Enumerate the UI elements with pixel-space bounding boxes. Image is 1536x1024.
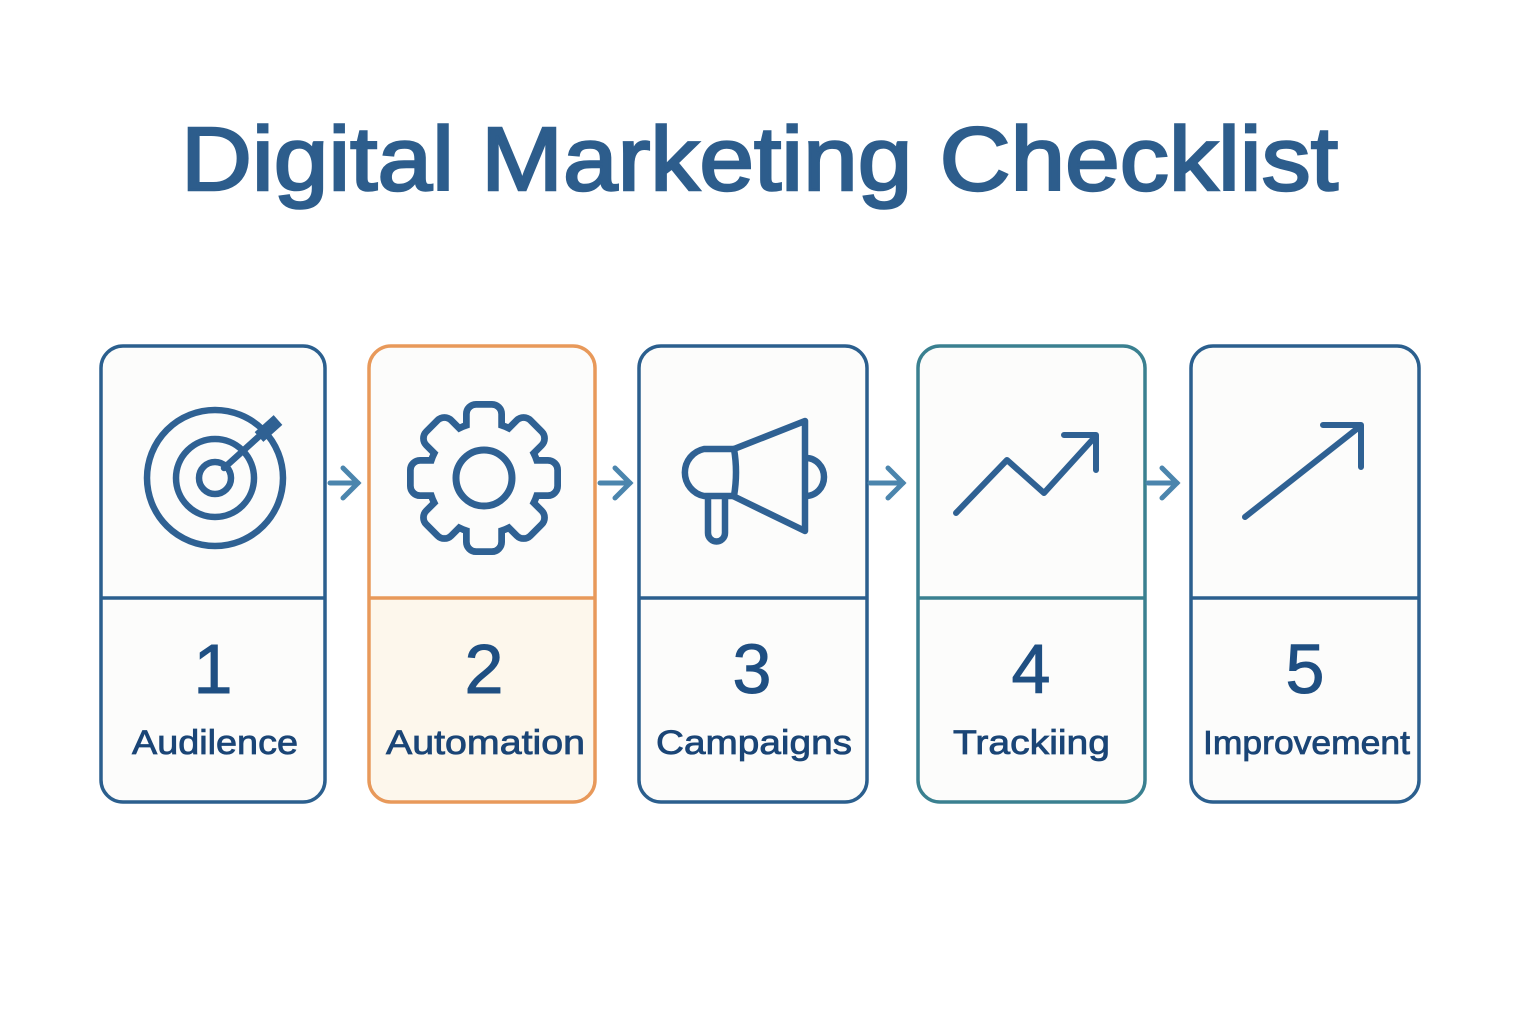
label: Audilence: Audilence: [132, 724, 298, 762]
icon: arrow up-right: [1245, 425, 1361, 517]
card 2: Automation: [369, 346, 595, 802]
arrow 4-5: [1148, 468, 1177, 498]
arrow 3-4: [870, 468, 903, 498]
number 5: 5: [1286, 630, 1324, 708]
card 5: Improvement: [1191, 346, 1419, 802]
icon: megaphone: [685, 421, 824, 542]
label: Improvement: Improvement: [1203, 724, 1410, 761]
icon: line chart: [956, 435, 1096, 513]
icon: gear: [414, 408, 554, 548]
label: Automation: Automation: [386, 724, 585, 762]
arrow 2-3: [600, 468, 630, 498]
arrow 1-2: [330, 468, 358, 498]
label: Campaigns: Campaigns: [656, 724, 852, 762]
card 4: Tracking: [918, 346, 1145, 802]
title: Digital Marketing Checklist: [181, 110, 1338, 210]
number 4: 4: [1012, 630, 1050, 708]
number 1: 1: [194, 630, 232, 708]
icon: target: [147, 410, 283, 546]
number 2: 2: [465, 630, 503, 708]
label: Trackiing: Trackiing: [953, 724, 1110, 762]
card 3: Campaigns: [639, 346, 867, 802]
number 3: 3: [733, 630, 771, 708]
card 1: Audience: [101, 346, 325, 802]
